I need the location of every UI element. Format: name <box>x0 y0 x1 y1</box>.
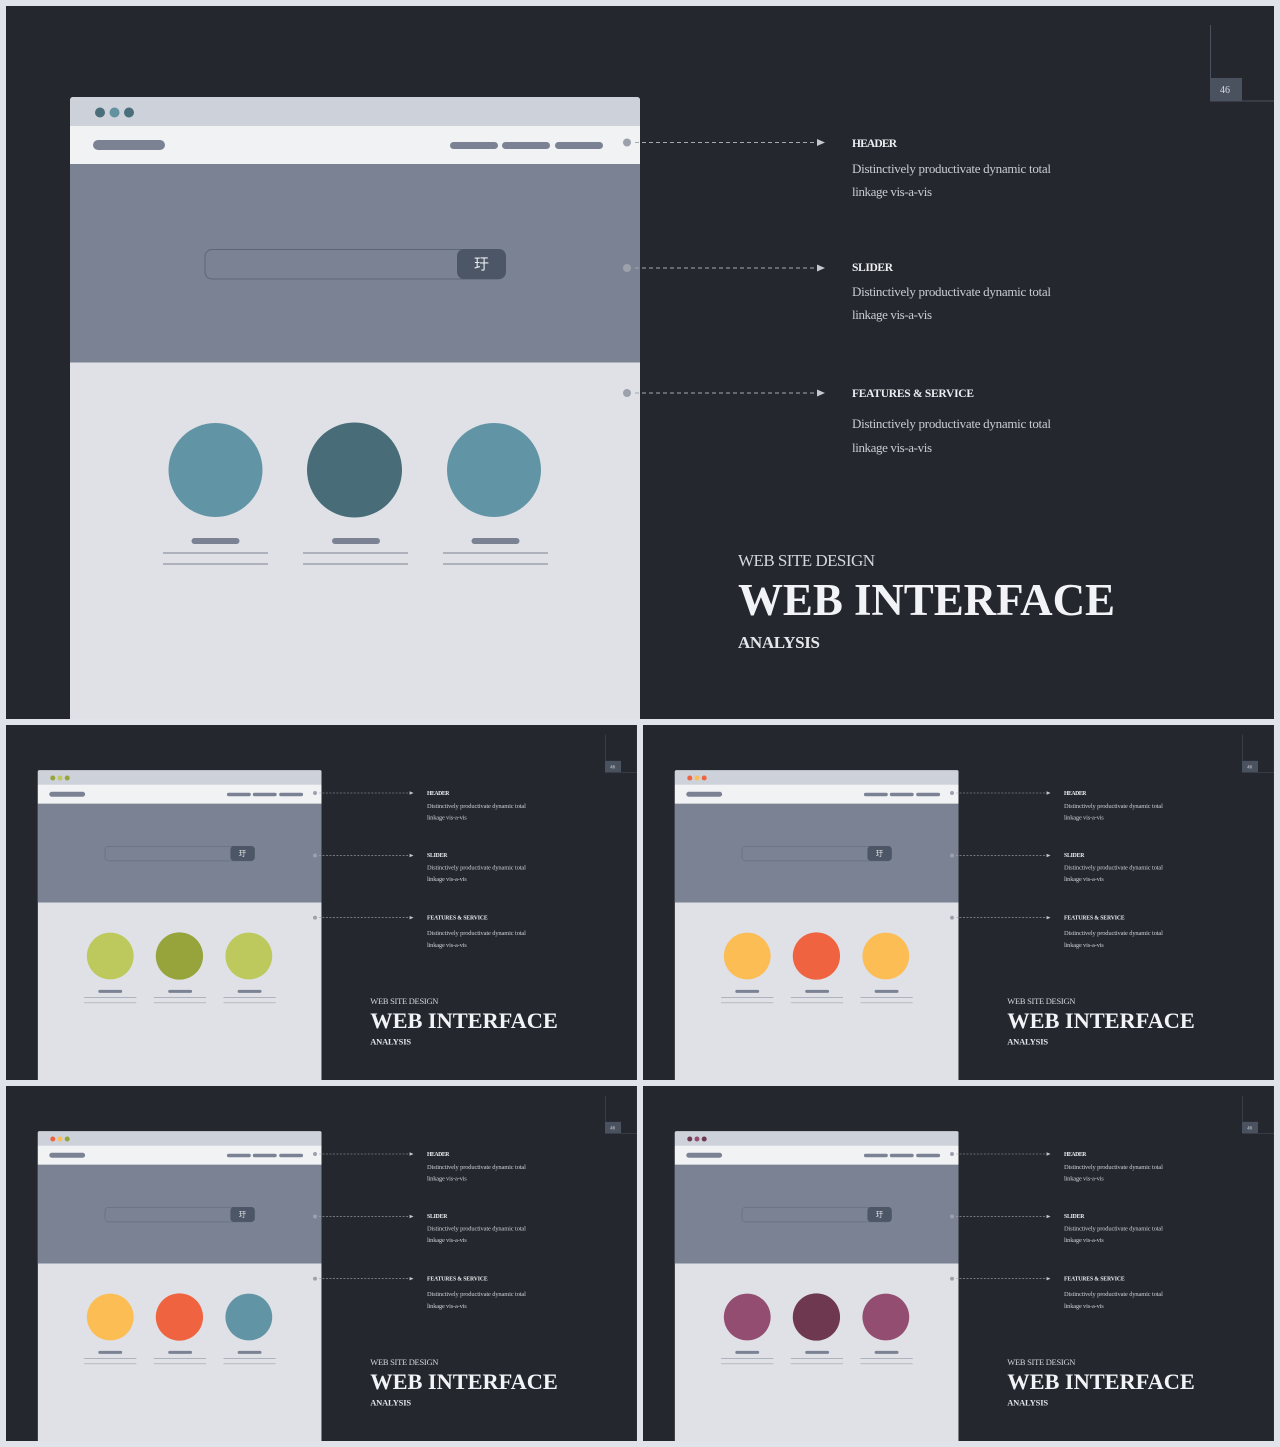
callout text: linkage vis-a-vis <box>427 1176 467 1183</box>
callout text: Distinctively productivate dynamic total <box>852 161 1051 176</box>
title block: WEB SITE DESIGN <box>370 1357 438 1367</box>
nav bar <box>686 1153 940 1158</box>
title block: WEB SITE DESIGN <box>1007 1357 1075 1367</box>
callout text: linkage vis-a-vis <box>427 942 467 949</box>
callout text: linkage vis-a-vis <box>852 440 932 455</box>
search box: 玗 <box>239 849 247 858</box>
callout text: SLIDER <box>1064 853 1085 859</box>
title block <box>1007 996 1195 1047</box>
callout text: SLIDER <box>1064 1214 1085 1220</box>
browser mockup <box>675 1131 958 1441</box>
callout text <box>852 138 1051 455</box>
callout arrows <box>313 1152 414 1281</box>
search box: 玗 <box>876 1210 884 1219</box>
title block: ANALYSIS <box>370 1398 411 1408</box>
feature circles <box>168 422 541 518</box>
search box <box>205 249 506 279</box>
callout text: Distinctively productivate dynamic total <box>852 416 1051 431</box>
page tag: 46 <box>1247 1126 1253 1131</box>
panel: green variant <box>6 725 637 1080</box>
search box <box>105 846 255 861</box>
feature circles <box>87 932 272 980</box>
nav bar <box>49 792 303 797</box>
title block <box>370 996 558 1047</box>
callout text <box>1064 791 1163 949</box>
page tag: 46 <box>610 765 616 770</box>
feature captions <box>721 990 913 1003</box>
callout text <box>427 1152 526 1310</box>
browser mockup <box>70 97 640 719</box>
callout text: SLIDER <box>427 1214 448 1220</box>
browser mockup <box>38 770 321 1080</box>
nav bar <box>49 1153 303 1158</box>
window dots <box>687 776 707 781</box>
panel: mixed colour variant <box>6 1086 637 1441</box>
title block: WEB INTERFACE <box>370 1369 558 1394</box>
panel: main slide teal <box>6 6 1274 719</box>
page tag <box>605 1095 637 1133</box>
feature circles <box>87 1293 272 1341</box>
title block <box>370 1357 558 1408</box>
callout text: Distinctively productivate dynamic total <box>1064 803 1163 810</box>
page tag: 46 <box>610 1126 616 1131</box>
callout text: HEADER <box>1064 791 1087 797</box>
callout text: SLIDER <box>852 262 894 274</box>
callout text: Distinctively productivate dynamic total <box>427 1291 526 1298</box>
callout text: linkage vis-a-vis <box>427 876 467 883</box>
page tag <box>1210 25 1274 101</box>
window dots <box>95 108 134 118</box>
callout text: linkage vis-a-vis <box>427 815 467 822</box>
callout text: linkage vis-a-vis <box>1064 815 1104 822</box>
title block: WEB SITE DESIGN <box>738 551 875 570</box>
title block: ANALYSIS <box>738 633 820 652</box>
callout text: Distinctively productivate dynamic total <box>427 930 526 937</box>
callout text: linkage vis-a-vis <box>1064 1237 1104 1244</box>
page tag <box>605 734 637 772</box>
title block: ANALYSIS <box>370 1037 411 1047</box>
callout text: linkage vis-a-vis <box>852 307 932 322</box>
callout text: Distinctively productivate dynamic total <box>427 864 526 871</box>
callout arrows <box>950 1152 1051 1281</box>
callout text: FEATURES & SERVICE <box>1064 1277 1125 1283</box>
callout arrows <box>623 138 825 397</box>
feature captions <box>84 990 276 1003</box>
callout text: linkage vis-a-vis <box>427 1237 467 1244</box>
callout text: Distinctively productivate dynamic total <box>852 284 1051 299</box>
callout text: linkage vis-a-vis <box>852 184 932 199</box>
title block: WEB INTERFACE <box>370 1008 558 1033</box>
callout text: SLIDER <box>427 853 448 859</box>
page tag: 46 <box>1220 85 1230 96</box>
callout text: FEATURES & SERVICE <box>1064 916 1125 922</box>
browser mockup <box>38 1131 321 1441</box>
callout text: linkage vis-a-vis <box>1064 1176 1104 1183</box>
title block: WEB INTERFACE <box>1007 1369 1195 1394</box>
callout text: Distinctively productivate dynamic total <box>1064 1225 1163 1232</box>
nav bar <box>686 792 940 797</box>
feature captions <box>163 538 548 564</box>
search box: 玗 <box>876 849 884 858</box>
callout text: FEATURES & SERVICE <box>852 388 974 400</box>
title block: WEB SITE DESIGN <box>1007 996 1075 1006</box>
callout text: Distinctively productivate dynamic total <box>1064 1291 1163 1298</box>
feature captions <box>721 1351 913 1364</box>
search box <box>742 1207 892 1222</box>
window dots <box>687 1137 707 1142</box>
panel: orange variant <box>643 725 1274 1080</box>
callout text: HEADER <box>427 1152 450 1158</box>
callout text: FEATURES & SERVICE <box>427 1277 488 1283</box>
callout text: Distinctively productivate dynamic total <box>427 803 526 810</box>
callout text: HEADER <box>1064 1152 1087 1158</box>
callout text: linkage vis-a-vis <box>1064 942 1104 949</box>
nav bar <box>93 140 603 150</box>
panel: plum variant <box>643 1086 1274 1441</box>
callout text <box>427 791 526 949</box>
callout arrows <box>313 791 414 920</box>
title block: ANALYSIS <box>1007 1398 1048 1408</box>
callout text: FEATURES & SERVICE <box>427 916 488 922</box>
title block: WEB INTERFACE <box>1007 1008 1195 1033</box>
callout text: linkage vis-a-vis <box>1064 1303 1104 1310</box>
search box: 玗 <box>239 1210 247 1219</box>
page tag <box>1242 1095 1274 1133</box>
feature captions <box>84 1351 276 1364</box>
search box <box>105 1207 255 1222</box>
callout text: linkage vis-a-vis <box>427 1303 467 1310</box>
callout text: HEADER <box>852 138 898 150</box>
title block: WEB INTERFACE <box>738 575 1115 625</box>
page tag: 46 <box>1247 765 1253 770</box>
callout text: Distinctively productivate dynamic total <box>427 1225 526 1232</box>
search box: 玗 <box>474 256 489 273</box>
browser mockup <box>675 770 958 1080</box>
callout text: Distinctively productivate dynamic total <box>1064 1164 1163 1171</box>
callout text: linkage vis-a-vis <box>1064 876 1104 883</box>
feature circles <box>724 1293 909 1341</box>
feature circles <box>724 932 909 980</box>
search box <box>742 846 892 861</box>
title block <box>738 551 1115 652</box>
window dots <box>50 1137 70 1142</box>
page tag <box>1242 734 1274 772</box>
callout arrows <box>950 791 1051 920</box>
callout text <box>1064 1152 1163 1310</box>
callout text: Distinctively productivate dynamic total <box>1064 930 1163 937</box>
title block <box>1007 1357 1195 1408</box>
callout text: Distinctively productivate dynamic total <box>427 1164 526 1171</box>
callout text: Distinctively productivate dynamic total <box>1064 864 1163 871</box>
window dots <box>50 776 70 781</box>
title block: WEB SITE DESIGN <box>370 996 438 1006</box>
title block: ANALYSIS <box>1007 1037 1048 1047</box>
callout text: HEADER <box>427 791 450 797</box>
